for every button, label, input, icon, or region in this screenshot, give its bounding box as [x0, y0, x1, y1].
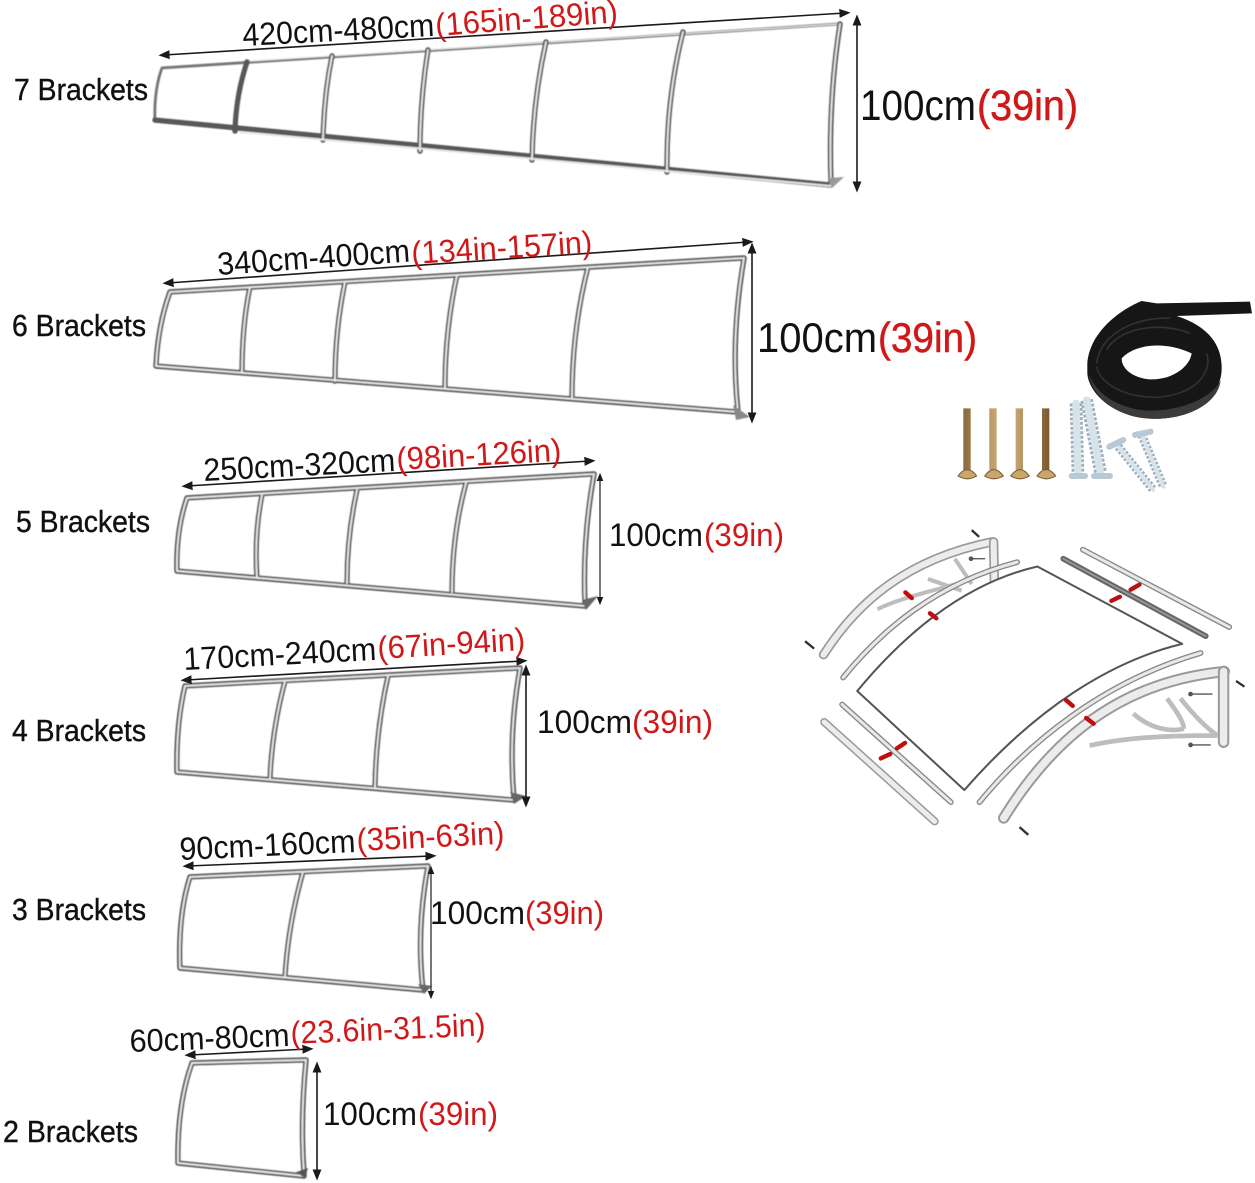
dimension: 100cm: 100cm	[860, 82, 976, 130]
dimension: 250cm-320cm: 250cm-320cm	[202, 442, 396, 488]
arrow: 3 brackets width	[188, 856, 431, 866]
dimension: 100cm: 100cm	[430, 895, 525, 931]
dimension: 98in-126in: (98in-126in)	[395, 432, 562, 477]
arrow: 6 brackets height	[751, 248, 753, 418]
arrow: 7 brackets width	[164, 13, 845, 55]
arrow: 3 brackets height	[430, 870, 432, 995]
arrow: 2 brackets width	[190, 1049, 308, 1055]
arrow: 4 brackets width	[186, 661, 522, 680]
dimension: 35in-63in: (35in-63in)	[356, 815, 505, 858]
dimension: 90cm-160cm: 90cm-160cm	[179, 823, 356, 867]
dimension: 39in: (39in)	[704, 517, 784, 553]
awning: 5 brackets	[177, 474, 598, 610]
diagram: exploded assembly	[805, 530, 1244, 835]
label: 7 Brackets: 7 Brackets	[14, 72, 148, 107]
label: 5 Brackets: 5 Brackets	[16, 504, 150, 539]
icon: silver wood screws	[1072, 400, 1163, 490]
label: 2 Brackets: 2 Brackets	[3, 1114, 138, 1149]
icon: black rubber seal strip coil	[1087, 301, 1252, 419]
dimension: 39in: (39in)	[418, 1096, 498, 1132]
dimension: 39in: (39in)	[878, 314, 977, 361]
arrow: 5 brackets height	[599, 477, 601, 601]
dimension: 100cm: 100cm	[757, 314, 877, 361]
arrow: 5 brackets width	[187, 461, 590, 486]
row: 2 brackets	[3, 1007, 498, 1178]
label: 4 Brackets: 4 Brackets	[12, 713, 146, 748]
left arm bracket	[824, 542, 995, 655]
arrow: 4 brackets height	[525, 670, 527, 802]
row: 3 brackets	[12, 815, 604, 995]
dimension: 100cm: 100cm	[537, 704, 632, 740]
small end ticks	[805, 530, 1244, 835]
row: 6 brackets	[12, 224, 977, 420]
awning: 2 brackets	[178, 1060, 308, 1178]
dimension: 170cm-240cm: 170cm-240cm	[182, 631, 377, 677]
row: 4 brackets	[12, 621, 713, 804]
dimension: 340cm-400cm: 340cm-400cm	[216, 233, 411, 282]
hardware: seal strip and screws	[958, 301, 1252, 490]
panel outline	[857, 566, 1182, 790]
dimension: 39in: (39in)	[525, 895, 604, 931]
arrow: 7 brackets height	[856, 20, 858, 187]
left rail	[843, 562, 1017, 678]
awning: 7 brackets	[155, 24, 844, 188]
awning: 3 brackets	[180, 866, 432, 994]
arrow: 2 brackets height	[316, 1067, 318, 1175]
label: 3 Brackets: 3 Brackets	[12, 892, 146, 927]
label: 6 Brackets: 6 Brackets	[12, 308, 146, 343]
dimension: 134in-157in: (134in-157in)	[410, 224, 593, 271]
row: 5 brackets	[16, 432, 784, 610]
dimension: 100cm: 100cm	[609, 517, 703, 553]
arrow: 6 brackets width	[168, 242, 748, 283]
dimension: 60cm-80cm: 60cm-80cm	[129, 1017, 290, 1059]
right arm bracket	[1004, 672, 1224, 818]
dimension: 39in: (39in)	[977, 82, 1078, 130]
icon: gold expansion bolts	[958, 408, 1056, 479]
dimension: 39in: (39in)	[632, 704, 713, 740]
bottom rails	[824, 705, 951, 821]
row: 7 brackets	[14, 0, 1078, 188]
dimension: 420cm-480cm: 420cm-480cm	[241, 7, 435, 53]
awning: 6 brackets	[156, 258, 750, 420]
dimension: 67in-94in: (67in-94in)	[376, 621, 526, 666]
dimension: 23.6in-31.5in: (23.6in-31.5in)	[290, 1007, 486, 1051]
right rail	[979, 653, 1201, 802]
top rails	[1063, 550, 1229, 636]
red sealing marks	[881, 585, 1139, 758]
awning: 4 brackets	[177, 668, 526, 804]
dimension: 100cm: 100cm	[323, 1096, 417, 1132]
